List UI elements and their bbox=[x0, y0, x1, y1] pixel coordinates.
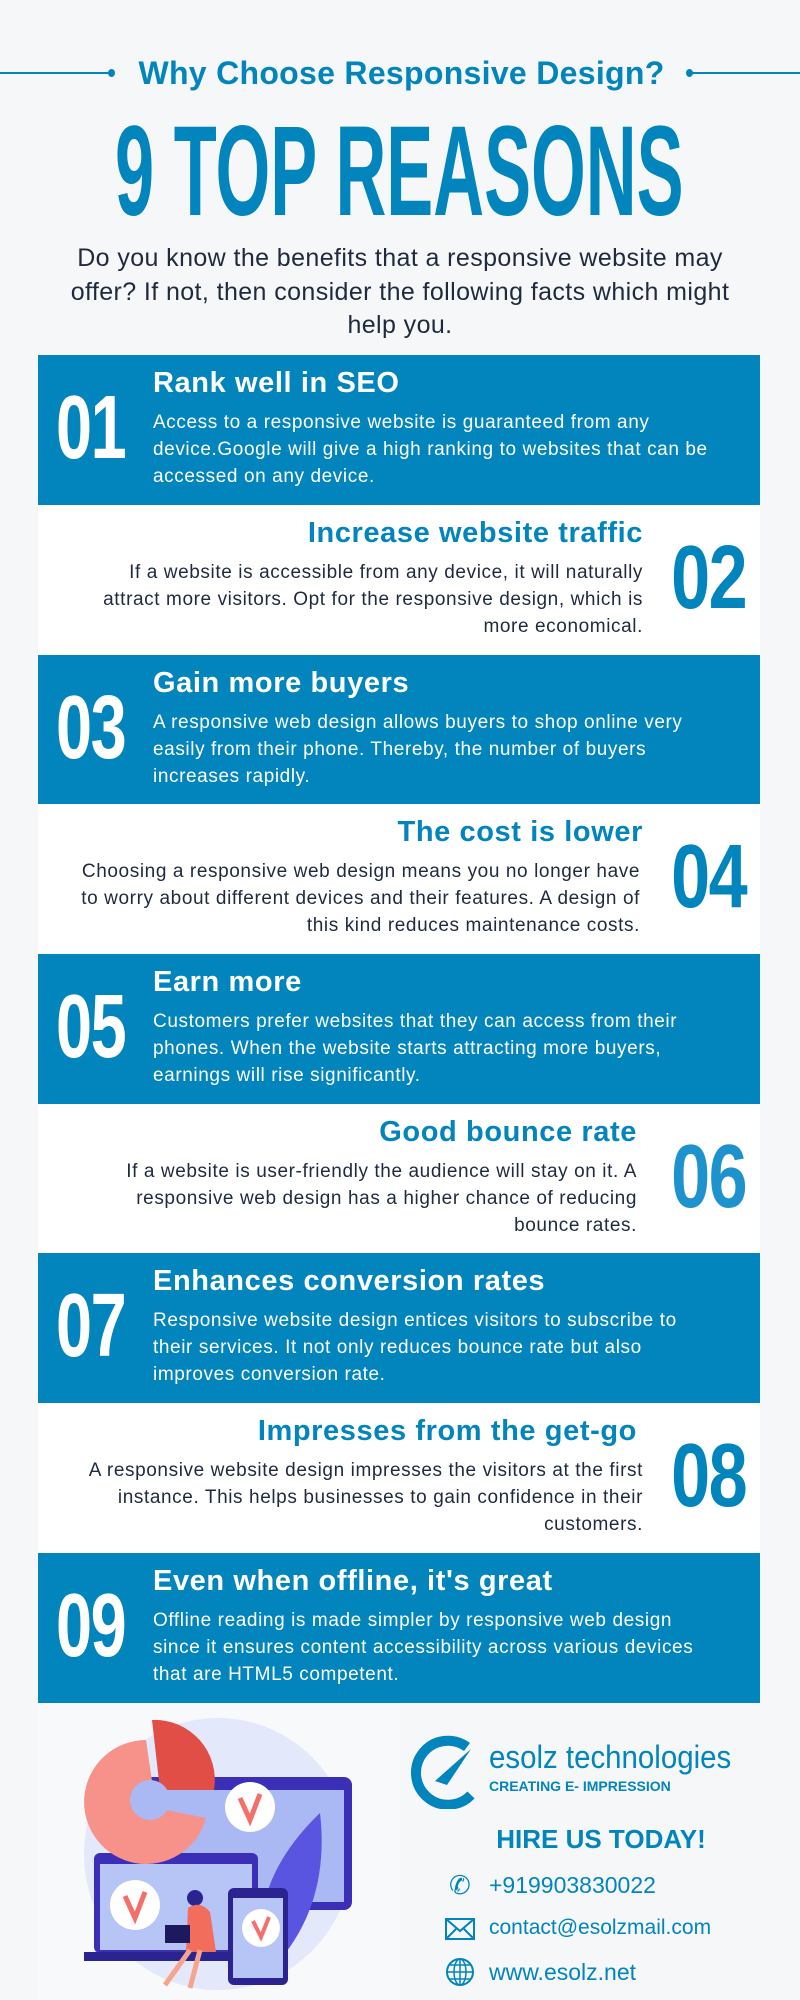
text 01: Access to a responsive website is guaranteed from any bbox=[153, 412, 649, 433]
text 08: A responsive website design impresses the visitors at the first bbox=[89, 1460, 643, 1481]
text 08 bbox=[88, 1460, 643, 1535]
text 08: customers. bbox=[544, 1514, 643, 1535]
logo text: esolz technologies bbox=[489, 1739, 731, 1775]
title: 9 TOP REASONS bbox=[115, 100, 684, 243]
text 09 bbox=[153, 1610, 693, 1685]
intro text: offer? If not, then consider the following facts which might bbox=[71, 278, 729, 306]
panel: 06 bbox=[38, 1104, 760, 1254]
text 07: improves conversion rate. bbox=[153, 1364, 386, 1385]
pie chart bbox=[152, 1720, 215, 1790]
text 02: more economical. bbox=[483, 616, 643, 637]
hire us heading: HIRE US TODAY! bbox=[496, 1824, 706, 1854]
checks bbox=[225, 1782, 275, 1832]
panel: 01: 01 bbox=[56, 378, 125, 478]
panel: 09: 09 bbox=[56, 1576, 125, 1676]
panel: 05 bbox=[38, 954, 760, 1104]
woman bbox=[187, 1890, 203, 1906]
text 03 bbox=[153, 712, 683, 787]
panel: 05: 05 bbox=[56, 977, 125, 1077]
text 01: accessed on any device. bbox=[153, 466, 375, 487]
text 04: to worry about different devices and their features. A design of bbox=[81, 888, 640, 909]
panel: 08: 08 bbox=[671, 1426, 746, 1526]
heading 06: Good bounce rate bbox=[379, 1116, 637, 1148]
text 07 bbox=[153, 1310, 677, 1385]
text 02 bbox=[103, 562, 643, 637]
text 05: phones. When the website starts attracting more buyers, bbox=[153, 1038, 661, 1059]
panel: 03: 03 bbox=[56, 678, 125, 778]
heading 08: Impresses from the get-go bbox=[258, 1415, 637, 1447]
intro text: help you. bbox=[347, 311, 453, 339]
contact: phone bbox=[449, 1870, 656, 1900]
panel: 09 bbox=[38, 1553, 760, 1703]
contact: phone: ✆ bbox=[449, 1870, 471, 1900]
subtitle: Why Choose Responsive Design? bbox=[138, 55, 665, 91]
monitor bbox=[122, 1777, 352, 1910]
heading 04: The cost is lower bbox=[398, 816, 643, 848]
text 06: If a website is user-friendly the audience will stay on it. A bbox=[126, 1161, 637, 1182]
heading 07: Enhances conversion rates bbox=[153, 1265, 545, 1297]
text 01 bbox=[153, 412, 708, 487]
text 03: A responsive web design allows buyers to shop online very bbox=[153, 712, 683, 733]
logo bbox=[411, 1736, 731, 1809]
contact: email: contact@esolzmail.com bbox=[489, 1916, 711, 1939]
panel: 04 bbox=[38, 804, 760, 954]
heading 01: Rank well in SEO bbox=[153, 367, 400, 399]
panel: 01 bbox=[38, 355, 760, 505]
text 09: since it ensures content accessibility across various devices bbox=[153, 1637, 693, 1658]
illustration: devices bbox=[84, 1718, 352, 1990]
heading 09: Even when offline, it's great bbox=[153, 1565, 553, 1597]
text 01: device.Google will give a high ranking to websites that can be bbox=[153, 439, 708, 460]
text 05: Customers prefer websites that they can access from their bbox=[153, 1011, 677, 1032]
panel: 07: 07 bbox=[56, 1276, 125, 1376]
text 06: responsive web design has a higher chance of reducing bbox=[136, 1188, 637, 1209]
leaf bbox=[260, 1813, 322, 1960]
tagline: CREATING E- IMPRESSION bbox=[489, 1778, 671, 1794]
text 03: easily from their phone. Thereby, the number of buyers bbox=[153, 739, 646, 760]
text 02: attract more visitors. Opt for the responsive design, which is bbox=[103, 589, 643, 610]
panel: 02: 02 bbox=[671, 528, 746, 628]
text 09: that are HTML5 competent. bbox=[153, 1664, 399, 1685]
contact: website: www.esolz.net bbox=[489, 1959, 636, 1985]
text 05 bbox=[153, 1011, 677, 1086]
heading 03: Gain more buyers bbox=[153, 667, 409, 699]
panel: 07 bbox=[38, 1253, 760, 1403]
text 07: Responsive website design entices visitors to subscribe to bbox=[153, 1310, 677, 1331]
text 06: bounce rates. bbox=[514, 1215, 637, 1236]
heading 05: Earn more bbox=[153, 966, 302, 998]
intro text: Do you know the benefits that a responsive website may bbox=[77, 244, 723, 272]
header decorative lines and subtitle bbox=[0, 55, 800, 91]
panel: 04: 04 bbox=[671, 827, 746, 927]
text 05: earnings will rise significantly. bbox=[153, 1065, 421, 1086]
text 04: Choosing a responsive web design means you no longer have bbox=[82, 861, 640, 882]
laptop bbox=[94, 1853, 258, 1953]
icon: logo mark bbox=[411, 1736, 474, 1809]
text 03: increases rapidly. bbox=[153, 766, 310, 787]
contact: phone: +919903830022 bbox=[489, 1872, 656, 1898]
text 04 bbox=[81, 861, 640, 936]
text 02: If a website is accessible from any device, it will naturally bbox=[129, 562, 643, 583]
text 09: Offline reading is made simpler by responsive web design bbox=[153, 1610, 672, 1631]
text 07: their services. It not only reduces bounce rate but also bbox=[153, 1337, 642, 1358]
text 08: instance. This helps businesses to gain confidence in their bbox=[118, 1487, 643, 1508]
heading 02: Increase website traffic bbox=[308, 517, 643, 549]
text 06 bbox=[126, 1161, 637, 1236]
intro text bbox=[71, 244, 729, 339]
panel: 03 bbox=[38, 655, 760, 805]
panel: 08 bbox=[38, 1403, 760, 1553]
panel: 06: 06 bbox=[671, 1127, 746, 1227]
phone bbox=[228, 1888, 288, 1985]
text 04: this kind reduces maintenance costs. bbox=[307, 915, 640, 936]
panel: 02 bbox=[38, 505, 760, 655]
